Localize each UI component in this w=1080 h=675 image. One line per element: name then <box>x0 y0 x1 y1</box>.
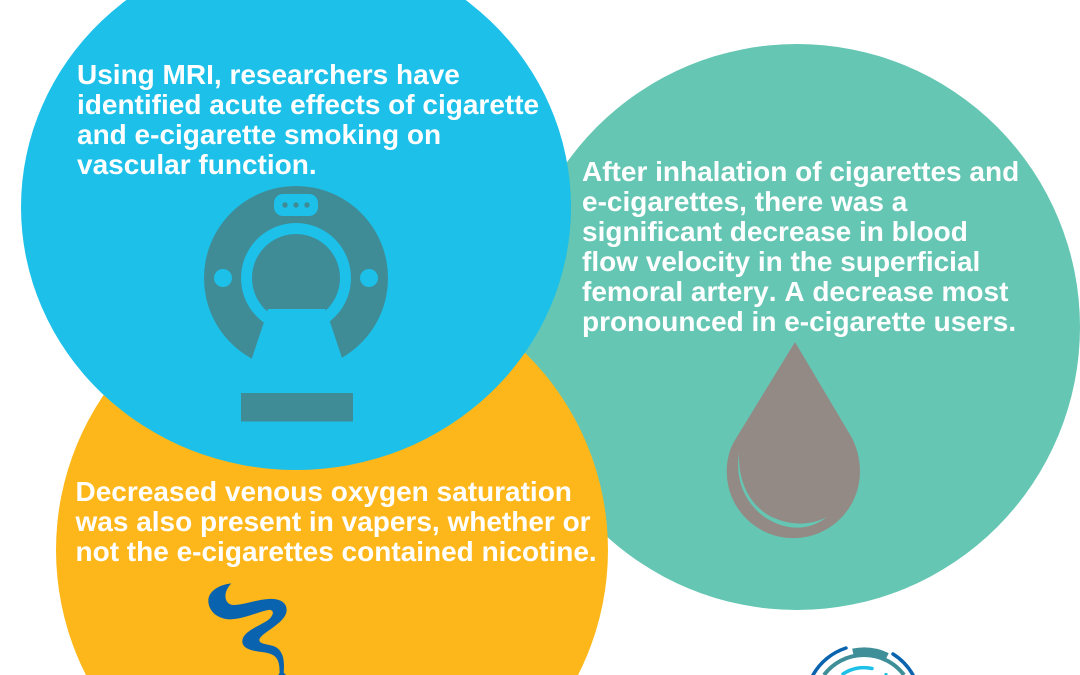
text block: venous oxygen saturation: Decreased venous oxygen saturation <box>76 476 572 507</box>
text block: blood flow velocity: e-cigarettes, there was a <box>582 186 907 217</box>
icon: blood drop <box>727 342 860 538</box>
panel: yellow circle <box>56 274 608 675</box>
text block: venous oxygen saturation: was also present in vapers, whether or <box>76 506 591 537</box>
panel: teal circle <box>514 44 1080 610</box>
text block: blood flow velocity: After inhalation of cigarettes and <box>582 156 1019 187</box>
text block: venous oxygen saturation: not the e-cigarettes contained nicotine. <box>76 536 597 567</box>
text block: blood flow velocity: femoral artery. A decrease most <box>582 276 1008 307</box>
panel: blue circle <box>21 0 571 470</box>
text block: MRI findings <box>77 59 539 180</box>
text block: MRI findings: vascular function. <box>77 149 317 180</box>
text block: venous oxygen saturation <box>75 476 597 567</box>
text block: blood flow velocity <box>582 156 1019 337</box>
icon: MRI scanner <box>204 186 388 422</box>
icon: blue smoke squiggle <box>208 583 287 675</box>
text block: MRI findings: identified acute effects of cigarette <box>77 89 539 120</box>
text block: blood flow velocity: pronounced in e-cigarette users. <box>582 306 1016 337</box>
text block: MRI findings: and e-cigarette smoking on <box>77 119 441 150</box>
text block: blood flow velocity: significant decrease in blood <box>582 216 968 247</box>
text block: MRI findings: Using MRI, researchers have <box>77 59 460 90</box>
icon: circular logo, cropped at page bottom <box>813 648 913 675</box>
text block: blood flow velocity: flow velocity in the superficial <box>582 246 980 277</box>
